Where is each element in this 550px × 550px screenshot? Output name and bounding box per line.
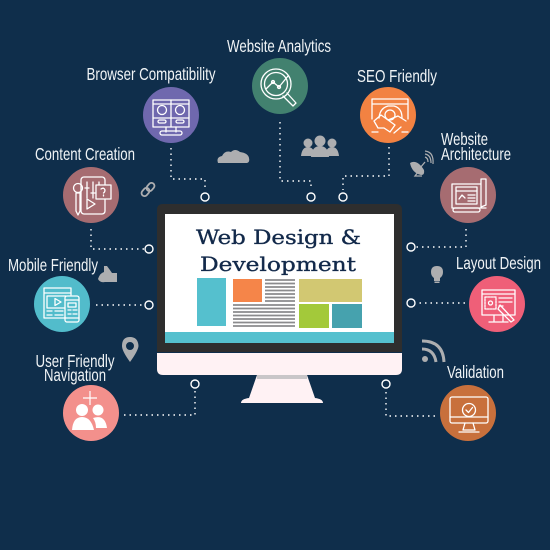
icon: thumbs up [98, 266, 117, 282]
label: Website Analytics: Website Analytics [227, 36, 331, 56]
monitor [157, 204, 402, 403]
icon: light bulb [431, 266, 443, 283]
icon: content creation [63, 167, 119, 223]
icon: chain link [140, 182, 156, 197]
label: Browser Compatibility: Browser Compatibility [86, 64, 216, 84]
icon: seo friendly [360, 87, 416, 143]
icon: layout design [469, 276, 525, 332]
label: Website Architecture: Architecture [441, 144, 511, 164]
icon: browser compatibility [143, 87, 199, 143]
webpage layout blocks [197, 278, 362, 328]
icon: cloud [218, 150, 249, 163]
label: User Friendly Navigation: User Friendly [36, 351, 115, 371]
icon: rss [422, 341, 444, 362]
monitor title: Web Design & [196, 225, 361, 249]
label: SEO Friendly: SEO Friendly [357, 66, 437, 86]
label: Content Creation: Content Creation [35, 144, 135, 164]
icon: website architecture [440, 167, 496, 223]
icon: satellite dish [410, 151, 433, 176]
icon: user friendly navigation [63, 385, 119, 441]
label: User Friendly Navigation: Navigation [44, 365, 106, 385]
label: Validation: Validation [447, 362, 504, 382]
icon: validation [440, 385, 496, 441]
icon: website analytics [252, 58, 308, 114]
connectors [91, 122, 466, 416]
icon: people group [301, 136, 339, 157]
label: Website Architecture: Website [441, 129, 488, 149]
monitor title: Development [200, 252, 356, 276]
label: Mobile Friendly: Mobile Friendly [8, 255, 98, 275]
icon: map pin [122, 337, 138, 362]
icon: mobile friendly [34, 276, 90, 332]
